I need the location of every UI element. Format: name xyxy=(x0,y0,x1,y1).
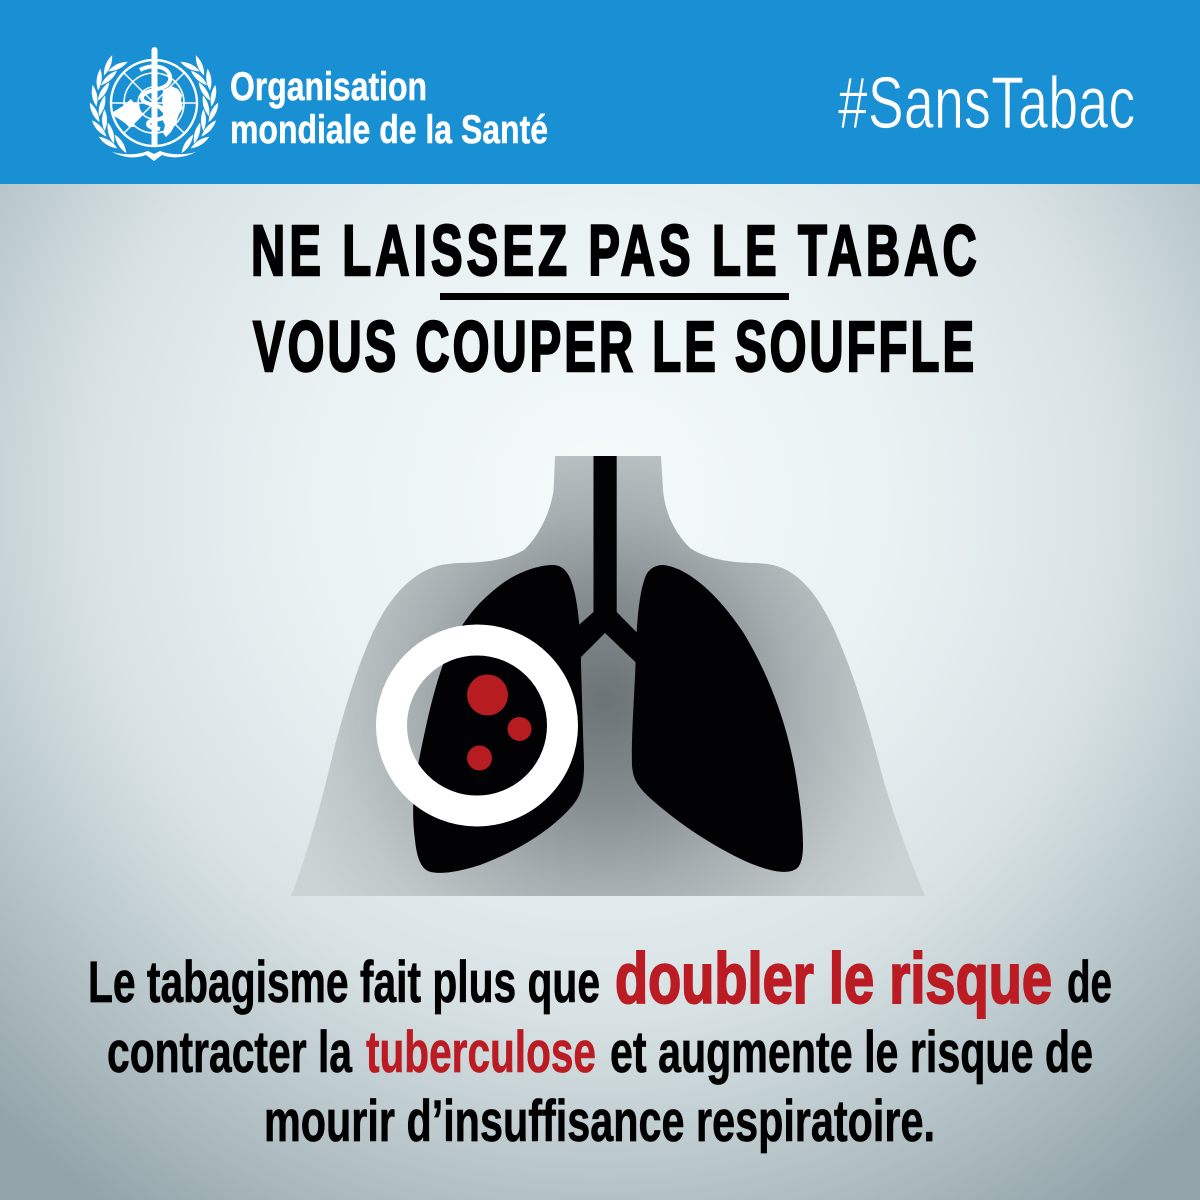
body text: de xyxy=(1067,950,1112,1015)
organisation name: mondiale de la Santé xyxy=(230,108,548,152)
trachea and bronchi xyxy=(545,456,667,678)
left lung xyxy=(413,565,584,873)
body text xyxy=(88,940,1112,1154)
body text: tuberculose xyxy=(366,1020,596,1085)
laurel wreath right xyxy=(179,54,220,154)
WHO emblem xyxy=(88,47,220,161)
body text: doubler le risque xyxy=(615,940,1052,1019)
body text: contracter la xyxy=(107,1020,353,1085)
right lung xyxy=(632,565,803,872)
red spot lower xyxy=(467,746,492,770)
title: NE LAISSEZ PAS LE TABAC xyxy=(251,210,977,290)
title: VOUS COUPER LE SOUFFLE xyxy=(253,306,974,386)
lungs illustration xyxy=(291,456,925,896)
body text: Le tabagisme fait plus que xyxy=(88,950,600,1015)
magnifier ring xyxy=(392,640,562,811)
laurel wreath left xyxy=(88,54,129,154)
title xyxy=(251,210,977,386)
hashtag: #SansTabac xyxy=(838,62,1135,144)
header band xyxy=(0,0,1200,184)
torso silhouette xyxy=(291,456,925,896)
body text: mourir d’insuffisance respiratoire. xyxy=(264,1089,935,1154)
organisation name: Organisation xyxy=(230,65,427,109)
red spot right xyxy=(508,717,532,741)
organisation name xyxy=(230,65,548,152)
red spot large xyxy=(467,674,508,716)
